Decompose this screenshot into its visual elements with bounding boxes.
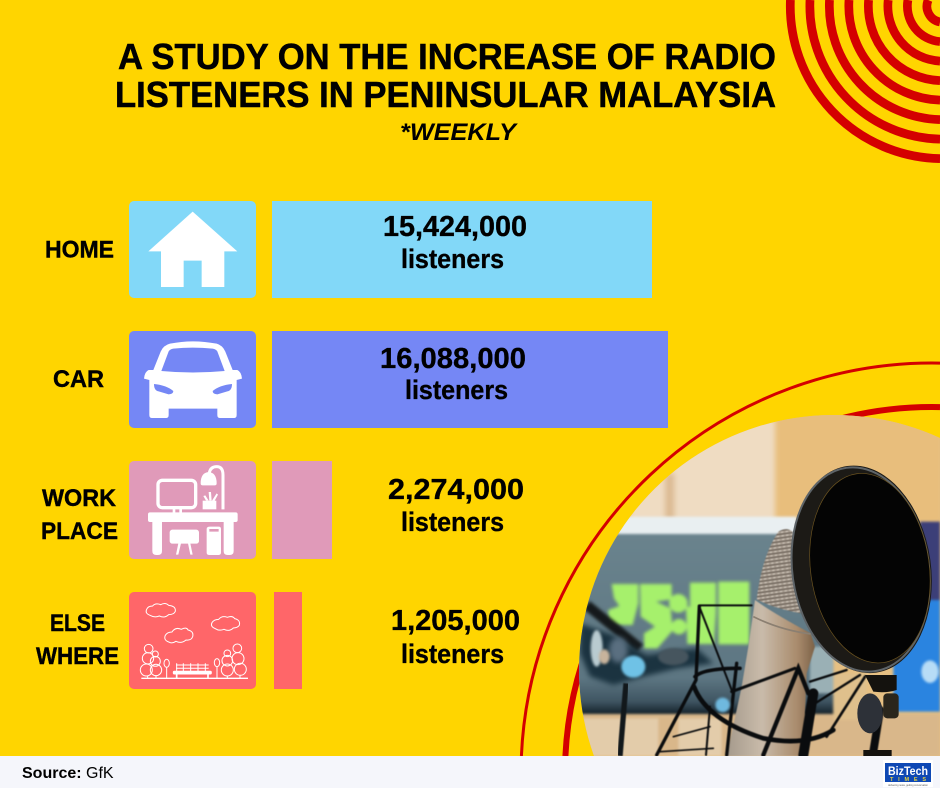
label: work place: PLACE: [41, 518, 118, 545]
value: work place: [388, 474, 524, 537]
value: home: [383, 211, 527, 274]
row: work place: [41, 461, 524, 559]
value: elsewhere: 1,205,000: [391, 605, 520, 637]
mic body: [727, 600, 815, 756]
title: A STUDY ON THE INCREASE OF RADIO: [118, 36, 776, 77]
label: home: HOME: [45, 236, 114, 264]
value: elsewhere: [391, 605, 520, 669]
logo: BizTech Times: TIMES: [890, 777, 926, 783]
source: Source: GfK: [22, 765, 114, 782]
footer bar: [0, 756, 940, 788]
mic grille: [757, 529, 801, 613]
value: home: listeners: [401, 244, 504, 274]
label: work place: [41, 485, 118, 545]
label: elsewhere: WHERE: [36, 643, 119, 670]
value: work place: 2,274,000: [388, 474, 524, 506]
value: car: 16,088,000: [380, 343, 526, 375]
logo: BizTech Times: BizTech: [888, 764, 928, 778]
label: car: CAR: [53, 366, 104, 393]
concentric rings: top right: [790, 0, 940, 159]
icon: park: [129, 592, 256, 689]
value: elsewhere: listeners: [401, 639, 504, 669]
bar: work place: [272, 461, 332, 559]
bar: home: [272, 201, 652, 298]
label: work place: WORK: [42, 485, 117, 512]
value: home: 15,424,000: [383, 211, 527, 243]
value: work place: listeners: [401, 507, 504, 537]
decorative arcs around photo: [521, 363, 940, 756]
label: elsewhere: ELSE: [50, 610, 105, 637]
value: car: [380, 343, 526, 405]
pop filter: [790, 466, 932, 674]
bar: elsewhere: [274, 592, 302, 689]
photo: microphone in radio studio: [577, 407, 940, 756]
icon: house: [129, 201, 256, 298]
logo: BizTech Times: [883, 760, 933, 787]
digits: [608, 582, 749, 648]
icon: desk: [129, 461, 256, 559]
row: car: [53, 331, 668, 428]
bar: car: [272, 331, 668, 428]
row: elsewhere: [36, 592, 520, 689]
logo: BizTech Times: delivering news, getting conversation: [888, 783, 928, 787]
row: home: [45, 201, 652, 298]
title: LISTENERS IN PENINSULAR MALAYSIA: [115, 74, 776, 115]
label: elsewhere: [36, 610, 119, 670]
stand: [657, 605, 880, 755]
boom arm: [580, 605, 713, 756]
title: [115, 36, 776, 115]
subtitle: *WEEKLY: [400, 119, 518, 146]
icon: car: [129, 331, 256, 428]
value: car: listeners: [405, 375, 508, 405]
